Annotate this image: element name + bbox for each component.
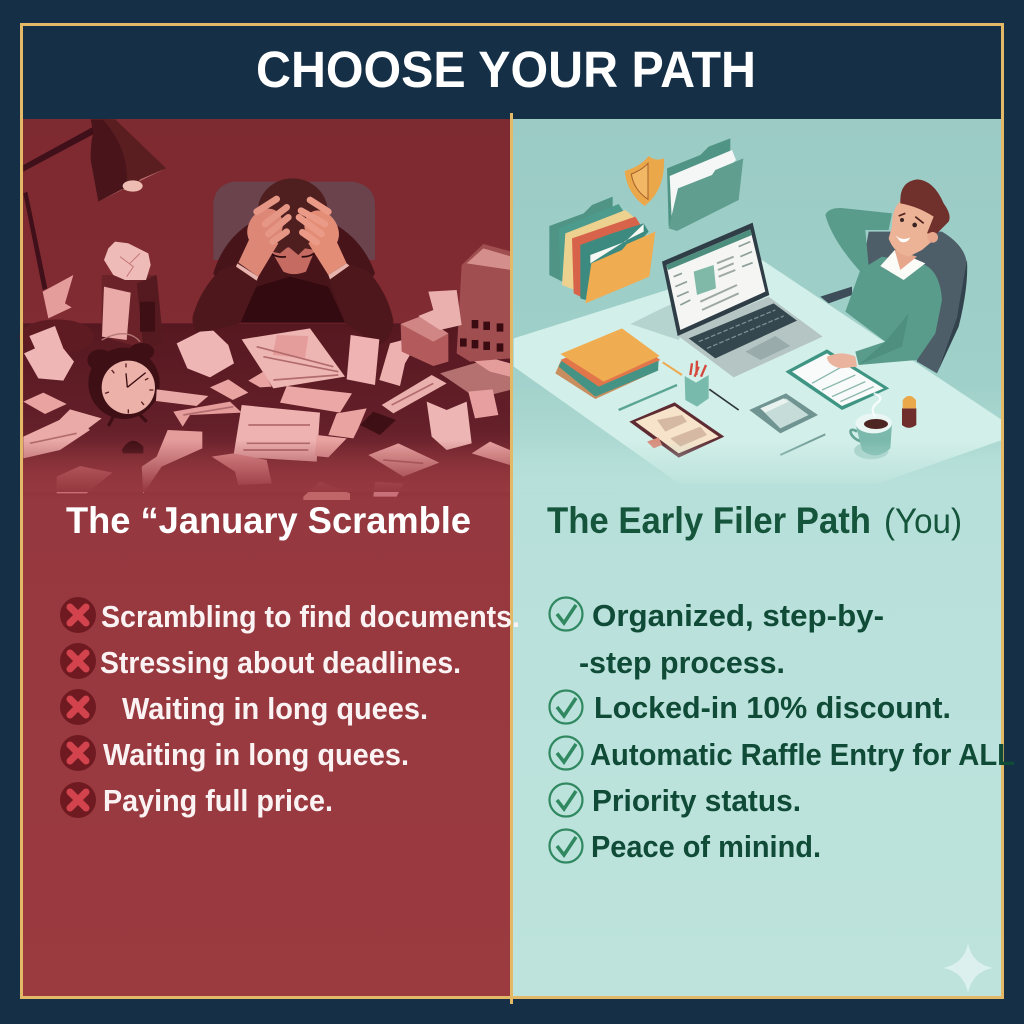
list: Early Filer benefits [550, 598, 1015, 864]
heading: January Scramble: The “January Scramble [66, 500, 471, 541]
header band [22, 25, 1002, 119]
icon: alarm clock [87, 334, 160, 426]
crumpled paper on box [102, 242, 163, 348]
icon: shield [625, 156, 664, 206]
file boxes right [401, 244, 512, 366]
icon: coffee mug [851, 393, 892, 459]
icon: desk lamp [19, 119, 166, 354]
icon: cross 1 [60, 597, 96, 633]
chair [213, 182, 375, 260]
man holding his head [193, 178, 393, 346]
heading main: The Early Filer Path [547, 500, 871, 541]
icon: cross 5 [60, 782, 96, 818]
desk front shade [514, 367, 679, 500]
form lines [30, 347, 433, 463]
icon: check 5 [550, 830, 582, 862]
desk [514, 260, 1002, 483]
icon: stacked colour folders [549, 197, 655, 303]
item 1 line 2: -step process. [579, 645, 785, 680]
illustration: relaxed man at tidy desk [514, 138, 1002, 500]
icon: check 1 [550, 598, 582, 630]
icon: cross 4 [60, 735, 96, 771]
desk surface [23, 323, 512, 500]
panel: January Scramble [19, 119, 512, 997]
paper sheet near lamp [43, 275, 73, 318]
stack of books [555, 328, 660, 399]
item 1 line 1: Organized, step-by- [592, 598, 884, 633]
panel: Early Filer Path [512, 119, 1002, 997]
illustration: stressed man at messy desk [19, 119, 512, 500]
title: CHOOSE YOUR PATH [256, 41, 756, 98]
item 5: Peace of minind. [591, 829, 821, 864]
icon: check 2 [550, 690, 582, 724]
man leaning back [820, 179, 967, 373]
calculator [749, 393, 818, 433]
icon: cross 2 [60, 643, 96, 679]
pill bottle [902, 396, 916, 428]
icon: check 4 [550, 784, 582, 816]
pencil cup [619, 361, 739, 410]
item 3: Waiting in long quees. [122, 691, 428, 726]
image fade [512, 440, 1002, 492]
crumpled paper left [24, 326, 74, 381]
heading: Early Filer Path [547, 500, 962, 541]
pen [780, 434, 825, 455]
item 2: Locked-in 10% discount. [594, 690, 951, 725]
list: January Scramble drawbacks [60, 597, 520, 818]
icon: check 3 [550, 736, 582, 770]
scattered papers [23, 328, 510, 500]
item 2: Stressing about deadlines. [100, 645, 461, 680]
image fade [23, 440, 512, 492]
item 4: Waiting in long quees. [103, 737, 409, 772]
clipboard under hand [785, 349, 889, 410]
icon: cross 3 [60, 689, 96, 725]
heading suffix: (You) [884, 502, 962, 541]
icon: teal folder with documents [667, 138, 743, 231]
item 1: Scrambling to find documents. [101, 599, 520, 634]
phone and glasses [122, 412, 396, 453]
icon: sparkle [943, 943, 993, 993]
item 4: Priority status. [592, 783, 801, 818]
tablet with document [629, 402, 724, 458]
item 5: Paying full price. [103, 783, 333, 818]
centre divider [510, 113, 513, 1004]
laptop [630, 223, 823, 377]
